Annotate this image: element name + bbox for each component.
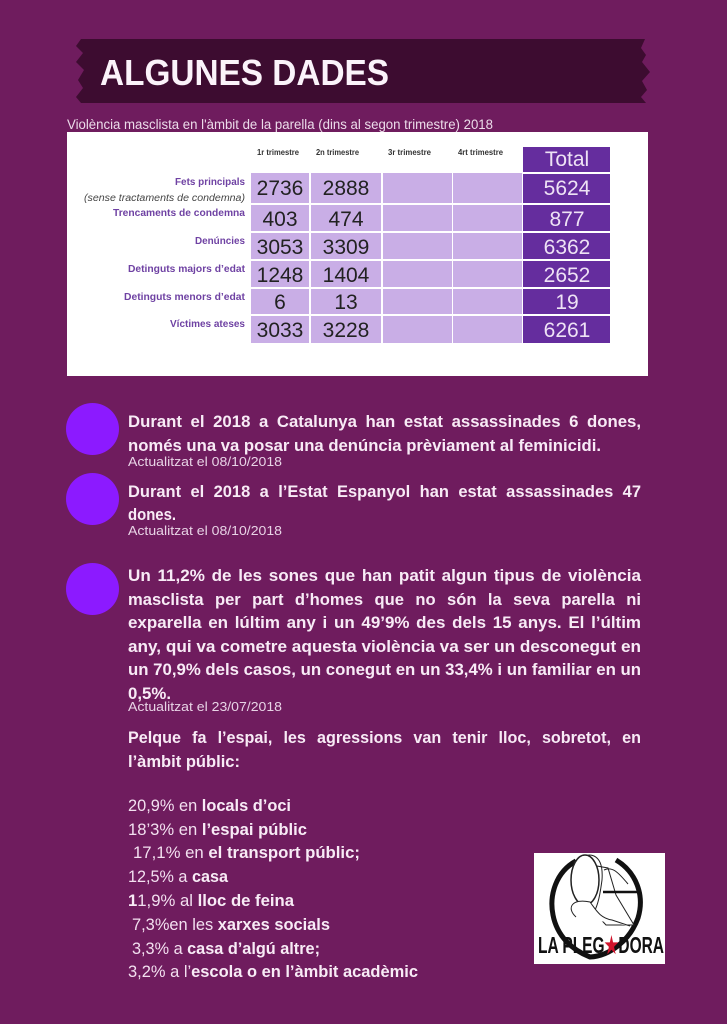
list of places: 3,3% a casa d’algú altre; <box>132 939 320 958</box>
text block: violence outside the couple: un 70,9% dels casos, un conegut en un 33,4% i un familiar en un <box>128 660 641 679</box>
text block: violence outside the couple: Un 11,2% de les sones que han patit algun tipus de violència <box>128 566 642 585</box>
column headers: 4rt trimestre <box>458 148 504 157</box>
list of places: 11,9% al lloc de feina <box>128 891 295 910</box>
second quarter values: 3309 <box>323 236 369 259</box>
row labels: Denúncies <box>195 236 245 247</box>
second quarter values: 3228 <box>323 319 369 342</box>
text block: Estat Espanyol: Durant el 2018 a l’Estat Espanyol han estat assassinades 47 <box>128 482 641 501</box>
text block: violence outside the couple: Actualitzat el 23/07/2018 <box>128 699 282 714</box>
second quarter values: 1404 <box>323 264 370 287</box>
text block: Catalunya: només una va posar una denúncia prèviament al feminicidi. <box>128 436 601 455</box>
total values: 19 <box>555 291 579 314</box>
bullet circle 2 <box>66 473 119 525</box>
icon: ring <box>552 860 640 957</box>
total values: 6362 <box>544 236 590 259</box>
list of places: 20,9% en locals d’oci <box>128 796 291 815</box>
text block: Catalunya <box>128 412 641 469</box>
list of places <box>128 796 418 981</box>
text block: violence outside the couple: any, qui va cometre aquesta violència va ser un desconegut en <box>128 637 641 656</box>
column headers: 2n trimestre <box>316 148 360 157</box>
logo: La Plegadora <box>534 853 665 964</box>
first quarter values <box>257 177 303 342</box>
list of places: 3,2% a l’escola o en l’àmbit acadèmic <box>128 962 418 981</box>
first quarter values: 403 <box>262 208 298 231</box>
logo wordmark: LA PLEG★DORA <box>538 932 664 958</box>
total values: 877 <box>549 208 585 231</box>
text block: violence outside the couple <box>128 566 642 714</box>
column headers <box>257 148 504 157</box>
first quarter values: 1248 <box>257 264 303 287</box>
column headers: 1r trimestre <box>257 148 300 157</box>
text block: place intro: l’àmbit públic: <box>128 752 240 771</box>
text block: Catalunya: Actualitzat el 08/10/2018 <box>128 454 282 469</box>
title: ALGUNES DADES <box>100 52 389 93</box>
second quarter values: 2888 <box>323 177 369 200</box>
text block: place intro <box>128 728 641 771</box>
row labels: Trencaments de condemna <box>113 208 245 219</box>
total values: 2652 <box>544 264 590 287</box>
total values: Total <box>545 148 589 171</box>
text block: Estat Espanyol <box>128 482 641 538</box>
first quarter values: 6 <box>274 291 286 314</box>
text block: Estat Espanyol: dones. <box>128 505 176 524</box>
list of places: 7,3%en les xarxes socials <box>132 915 330 934</box>
first quarter values: 3053 <box>257 236 303 259</box>
text block: violence outside the couple: 0,5%. <box>128 684 171 703</box>
row labels: Fets principals <box>175 177 245 188</box>
first quarter values: 2736 <box>257 177 303 200</box>
column headers: 3r trimestre <box>388 148 432 157</box>
total column cells <box>523 147 610 343</box>
bullet circle 3 <box>66 563 119 615</box>
icon: woman listening with megaphone <box>571 855 640 926</box>
row labels: Detinguts majors d’edat <box>128 264 246 275</box>
quarterly cells <box>251 173 522 343</box>
bullet circle 1 <box>66 403 119 455</box>
first quarter values: 3033 <box>257 319 303 342</box>
row labels: Víctimes ateses <box>170 319 245 330</box>
list of places: 18’3% en l’espai públic <box>128 820 307 839</box>
total values: 6261 <box>544 319 590 342</box>
total values: 5624 <box>544 177 591 200</box>
row labels <box>84 177 246 330</box>
text block: violence outside the couple: exparella en lúltim any i un 49’9% des dels 15 anys. El l’últim <box>128 613 641 632</box>
panel: data table <box>67 132 648 376</box>
list of places: 12,5% a casa <box>128 867 229 886</box>
row labels: Detinguts menors d’edat <box>124 292 246 303</box>
text block: Estat Espanyol: Actualitzat el 08/10/2018 <box>128 523 282 538</box>
second quarter values: 474 <box>328 208 364 231</box>
second quarter values <box>323 177 370 342</box>
table subtitle: Violència masclista en l'àmbit de la parella (dins al segon trimestre) 2018 <box>67 117 493 132</box>
total values <box>544 148 591 342</box>
text block: place intro: Pelque fa l’espai, les agressions van tenir lloc, sobretot, en <box>128 728 641 747</box>
text block: violence outside the couple: masclista per part d’homes que no són la seva parella ni <box>128 590 641 609</box>
text block: Catalunya: Durant el 2018 a Catalunya han estat assassinades 6 dones, <box>128 412 641 431</box>
row labels: (sense tractaments de condemna) <box>84 193 245 204</box>
second quarter values: 13 <box>334 291 358 314</box>
list of places: 17,1% en el transport públic; <box>133 843 360 862</box>
title banner <box>76 39 650 103</box>
